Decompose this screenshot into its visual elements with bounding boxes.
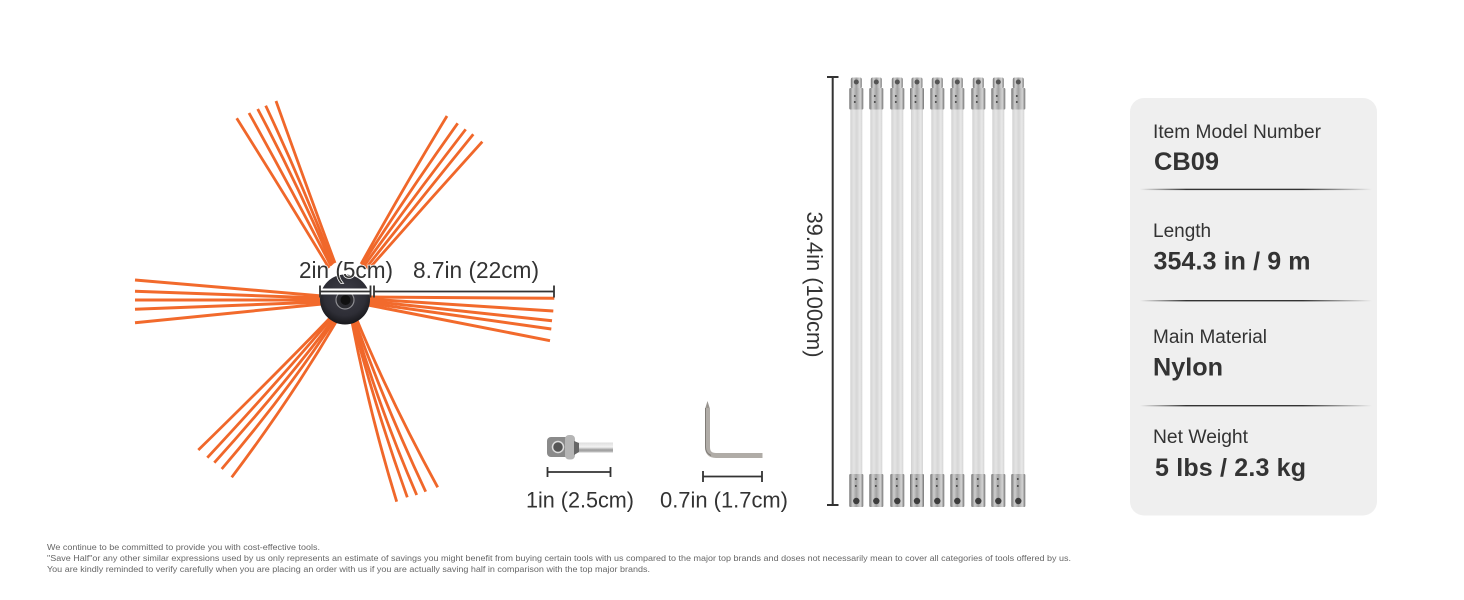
spec: length: 354.3 in / 9 m <box>1154 248 1310 276</box>
footer disclaimer <box>47 542 1071 574</box>
spec: item model number: CB09 <box>1154 148 1219 176</box>
hub <box>320 274 370 324</box>
footer disclaimer: "Save Half"or any other similar expressions used by us only represents an estimate of savings you might benefit from buying certain tools with us compared to the major top brands and doses not necessarily mean to cover all categories of tools offered by us. <box>47 553 1071 563</box>
footer disclaimer: We continue to be committed to provide you with cost-effective tools. <box>47 542 320 552</box>
footer disclaimer: You are kindly reminded to verify carefully when you are placing an order with us if you are actually saving half in comparison with the top major brands. <box>47 564 650 574</box>
bristles: right bundle <box>368 297 554 341</box>
icon: adapter bolt <box>547 435 613 460</box>
dimension: 1in adapter <box>526 467 634 512</box>
dimension: 0.7in hex key <box>660 471 788 512</box>
spec: length <box>1153 221 1310 276</box>
spec: length: Length <box>1153 221 1211 242</box>
spec: main material: Nylon <box>1153 354 1223 382</box>
dimension: 2in hub width: 2in (5cm) <box>299 257 393 283</box>
spec: net weight <box>1153 427 1306 482</box>
spec: main material <box>1153 327 1267 382</box>
icon: hex key <box>705 401 762 456</box>
spec: item model number <box>1153 122 1322 176</box>
bristles: left bundle <box>135 280 322 323</box>
dimension: 39.4in rod length <box>802 77 838 505</box>
extension rods <box>849 78 1025 507</box>
spec: net weight: 5 lbs / 2.3 kg <box>1155 454 1306 482</box>
dimension: 1in adapter: 1in (2.5cm) <box>526 488 634 512</box>
bristles: top-right bundle <box>361 116 482 270</box>
dimension: 8.7in bristle length <box>374 257 554 298</box>
bristles: bottom-right bundle <box>352 320 438 502</box>
panel: brush head <box>135 101 554 502</box>
spec: item model number: Item Model Number <box>1153 122 1322 143</box>
dimension: 39.4in rod length: 39.4in (100cm) <box>802 212 827 358</box>
panel: specifications <box>1130 98 1377 516</box>
dimension: 0.7in hex key: 0.7in (1.7cm) <box>660 488 788 512</box>
dimension: 2in hub width <box>299 257 393 298</box>
bristles: top-left bundle <box>237 101 335 268</box>
spec: net weight: Net Weight <box>1153 427 1249 448</box>
spec: main material: Main Material <box>1153 327 1267 348</box>
dimension: 8.7in bristle length: 8.7in (22cm) <box>413 257 539 283</box>
bristles: bottom-left bundle <box>198 318 336 477</box>
